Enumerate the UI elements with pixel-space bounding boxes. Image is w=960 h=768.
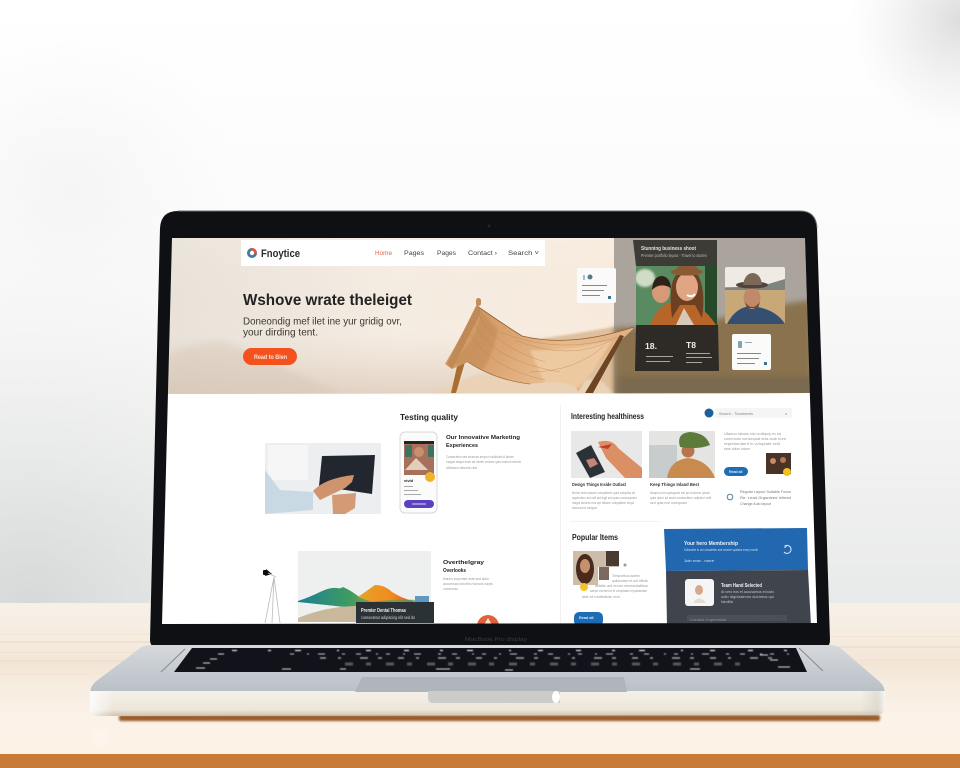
- card descriptions: sed quia non numquam: [650, 501, 687, 505]
- hero banner: [165, 236, 814, 396]
- chart image: [298, 551, 431, 624]
- dark testimonial panel: Team Hand Selected: [721, 583, 762, 589]
- feature heading: [446, 435, 520, 449]
- menu links: Pages: [404, 250, 425, 257]
- description: saepe eveniet ut et voluptates repudiandae: [590, 589, 647, 593]
- sand hill behind sail: [536, 326, 614, 394]
- card descriptions: magni dolores eos qui ratione voluptatem sequi: [572, 501, 634, 505]
- search bar: Search - Treatments: [719, 412, 753, 416]
- chart feature description: accumsan lobortis rhoncus turpis: [443, 582, 493, 586]
- menu links: Search ˅: [508, 250, 539, 257]
- menu links: [376, 250, 538, 256]
- search bar: [704, 408, 792, 418]
- help item: Regular Layout Suitable Focus: [740, 490, 791, 494]
- trackpad: [355, 677, 627, 692]
- laptop base: [90, 645, 885, 721]
- logo: [247, 248, 300, 260]
- card descriptions: aspernatur aut odit aut fugit sed quia consequuntur: [572, 496, 638, 500]
- description: debitis aut rerum necessitatibus: [595, 584, 648, 588]
- person with plant photo: [649, 431, 715, 478]
- keyboard side strips: [161, 648, 823, 672]
- section heading: Testing quality: [400, 413, 459, 422]
- tablet photo: [265, 443, 381, 514]
- dark feature card with portrait: Stunning business shoot: [641, 246, 696, 252]
- logo: Fnoytice: [261, 248, 300, 260]
- blue button: Read all: [729, 470, 742, 474]
- keyboard: [174, 648, 807, 672]
- chart feature description: Mauris imperdiet ante sed dolor: [443, 577, 490, 581]
- card stats: 18.: [645, 342, 657, 351]
- heading: Popular Items: [572, 533, 618, 542]
- man in hat photo: [725, 267, 785, 324]
- distant hill: [170, 342, 312, 388]
- menu links: Pages: [437, 250, 457, 257]
- feature description: Consectetur sed eiusmod tempor incididunt ut labore: [446, 455, 514, 459]
- hero subtitle: [243, 316, 402, 338]
- section: interesting highlights: [571, 408, 792, 510]
- card descriptions: nesciunt neque: [572, 506, 597, 510]
- chart feature description: [443, 578, 493, 590]
- section divider: [560, 405, 561, 623]
- blue newsletter panel: Subscribe to our newsletter and receive updates every month: [684, 548, 758, 552]
- right column text: [724, 432, 786, 451]
- feature heading: Experiences: [446, 443, 478, 449]
- right column text: Ullamco laboris nisi ut aliquip ex ea: [724, 432, 781, 436]
- phone mockup: [400, 432, 437, 513]
- blue button: Read all: [579, 616, 594, 620]
- dark caption card: consectetur adipiscing elit sed do: [361, 615, 415, 620]
- card captions: [572, 482, 699, 487]
- help item: Change Auto layout: [740, 502, 771, 506]
- card descriptions: [572, 491, 711, 510]
- dark caption card: Premier Dental Thomas: [361, 608, 406, 614]
- portrait photo: [634, 264, 719, 326]
- search bar: ×: [785, 411, 788, 416]
- card descriptions: quia dolor sit amet consectetur adipisci velit: [650, 496, 711, 500]
- section: popular items: [572, 533, 648, 626]
- wooden table: [0, 603, 960, 768]
- website screen: [160, 236, 820, 637]
- phone mockup: vivid: [404, 478, 414, 483]
- table shadow: [119, 715, 880, 721]
- arrow icon: [784, 545, 791, 553]
- camera: [488, 224, 490, 228]
- hero heading: Wshove wrate theleiget: [243, 292, 413, 309]
- brand label on lid: MacBook Pro display: [465, 637, 528, 643]
- opening latch: [428, 691, 560, 703]
- card descriptions: Neque porro quisquam est qui dolorem ipsum: [650, 491, 710, 495]
- help item: [727, 490, 791, 506]
- right column text: esse cillum dolore: [724, 447, 750, 451]
- horizontal divider: [570, 521, 660, 522]
- chart feature heading: Overlooks: [443, 568, 466, 574]
- description: quibusdam et aut officiis: [612, 579, 648, 583]
- card stats: T8: [686, 341, 697, 350]
- portrait thumbnail: [685, 579, 714, 606]
- dark testimonial panel: blanditiis: [721, 600, 733, 604]
- chart feature heading: Overthelgray: [443, 560, 485, 566]
- collage photos: [573, 551, 626, 591]
- blue button: [724, 467, 748, 476]
- feature heading: Our Innovative Marketing: [446, 435, 520, 441]
- laptop lid: [150, 211, 830, 647]
- blue newsletter panel: Your hero Membership: [684, 541, 739, 547]
- feature description: ullamco laboris nisi: [446, 466, 477, 470]
- blue newsletter panel: [664, 528, 808, 571]
- menu links: Contact ›: [468, 250, 497, 257]
- section: testing quality: [263, 413, 521, 637]
- hero subtitle: your dirding tent.: [243, 328, 318, 338]
- card captions: Design Things Inside Outlast: [572, 482, 626, 487]
- dark caption card: [356, 602, 434, 623]
- chart feature description: commodo: [443, 587, 458, 591]
- card captions: Keep Things Inland Best: [650, 482, 699, 487]
- help item: Re: Lead Organized Inlined: [740, 496, 791, 500]
- menu links: Home: [375, 250, 392, 257]
- front edge: [90, 691, 885, 716]
- description: [582, 574, 648, 599]
- hero subtitle: Doneondig mef ilet ine yur gridig ovr,: [243, 316, 402, 328]
- dark testimonial panel: odio dignissimos ducimus qui: [721, 595, 774, 599]
- tripod lamp: [263, 569, 280, 623]
- hero button: [243, 348, 297, 365]
- phone in hand photo: [571, 431, 642, 478]
- dark testimonial panel: [666, 570, 811, 626]
- navigation bar: [241, 240, 545, 266]
- blue newsletter panel: Join now - more: [684, 559, 714, 563]
- dark feature card with portrait: [633, 240, 719, 371]
- card stats: [646, 342, 696, 349]
- card descriptions: Nemo enim ipsam voluptatem quia voluptas sit: [572, 491, 635, 495]
- small info card right: [732, 334, 771, 370]
- right image background: [614, 236, 814, 396]
- hero button: Read to Blen: [254, 355, 287, 361]
- heading: Interesting healthiness: [571, 412, 644, 421]
- description: sint et molestiae non: [582, 595, 620, 599]
- feature description: magna aliqua enim ad minim veniam quis nostrud exercit: [446, 460, 521, 464]
- small info card left: [577, 268, 616, 303]
- background wall: [0, 0, 960, 604]
- dark testimonial panel: At vero eos et accusamus et iusto: [721, 590, 774, 594]
- chart feature heading: [443, 560, 484, 572]
- small photo with badge: [766, 453, 791, 476]
- feature description: [446, 456, 521, 469]
- right column text: reprehenderit in voluptate velit: [724, 442, 780, 446]
- right column text: commodo consequat duis aute irure: [724, 437, 786, 441]
- orange badge: [477, 615, 499, 624]
- dark testimonial panel: Contact a specialist: [690, 618, 726, 622]
- hammock sail illustration: [445, 298, 634, 393]
- silver deck: [90, 645, 885, 694]
- dark feature card with portrait: Premier portfolio layout - Travel to stories: [641, 253, 708, 258]
- description: Temporibus autem: [612, 574, 640, 578]
